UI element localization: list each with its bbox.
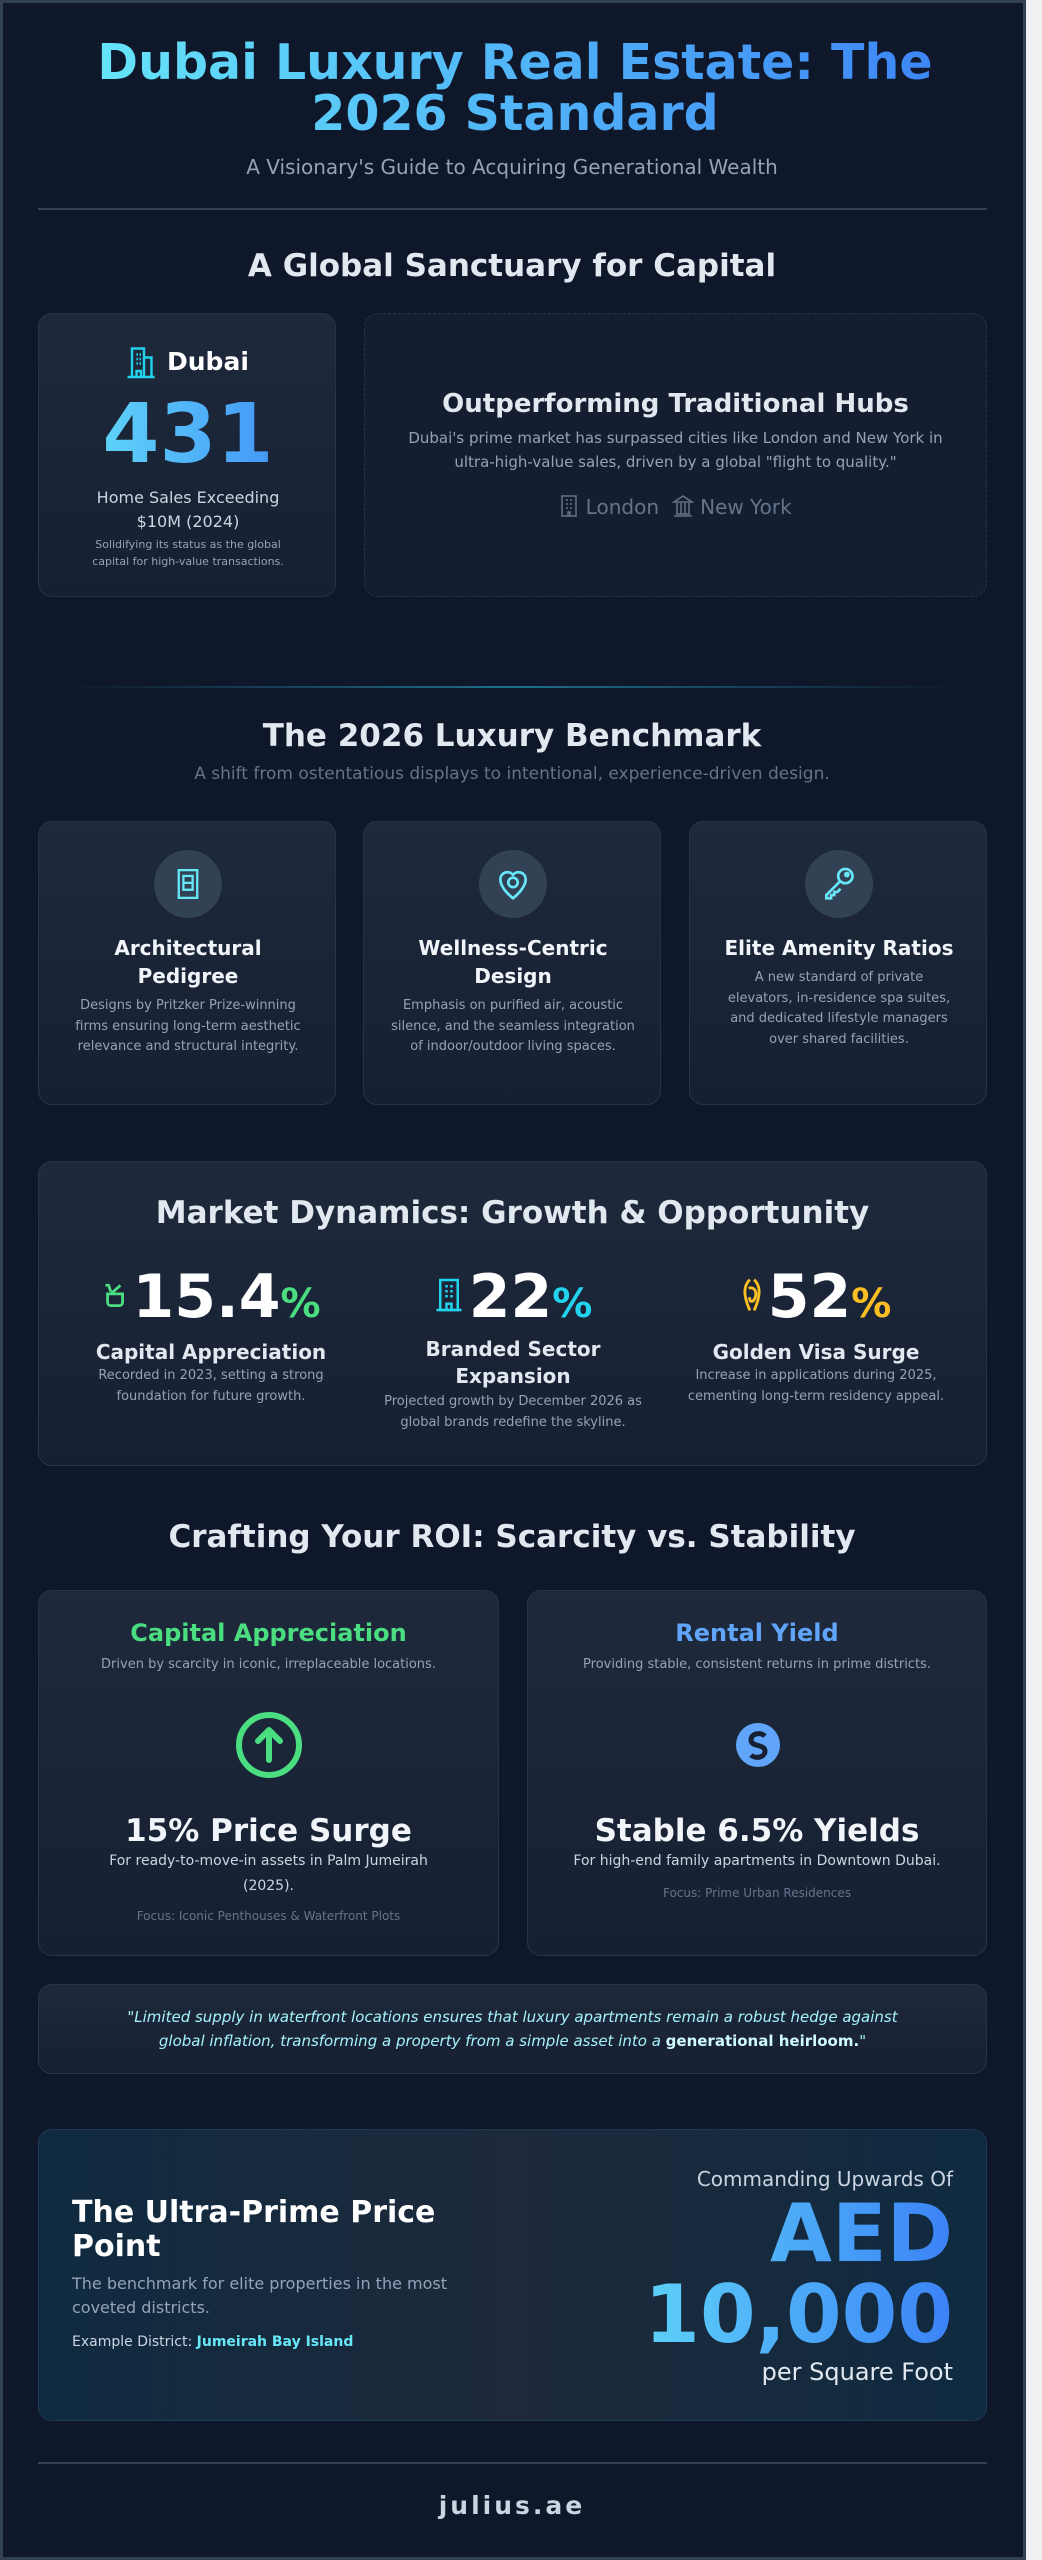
title <box>418 936 608 988</box>
focus: Focus: Iconic Penthouses & Waterfront Plots <box>137 1909 400 1923</box>
panel: Dubai stat <box>38 313 336 597</box>
title: Pedigree <box>138 964 238 988</box>
stat: 22% <box>384 1262 642 1430</box>
panel: ultra-prime price <box>38 2129 987 2421</box>
subtitle: benchmark: A shift from ostentatious displays to intentional, experience-driven design. <box>194 764 830 784</box>
price figure: per Square Foot <box>762 2358 953 2386</box>
desc: For ready-to-move-in assets in Palm Jumeirah (2025). <box>109 1853 428 1894</box>
title: Capital Appreciation <box>130 1619 407 1647</box>
stat: 52%: Golden Visa Surge <box>713 1340 919 1364</box>
subtitle: Providing stable, consistent returns in prime districts. <box>583 1657 931 1672</box>
panel: market dynamics <box>38 1161 987 1466</box>
number 431: 431 <box>102 387 274 482</box>
desc: A new standard of private elevators, in-residence spa suites, and dedicated lifestyle managers over shared facilities. <box>728 970 950 1046</box>
title: Design <box>474 964 552 988</box>
label: Dubai: Dubai <box>167 347 249 376</box>
price figure: 10,000 <box>644 2268 953 2361</box>
heading: The Ultra-Prime Price Point <box>72 2195 435 2264</box>
icon: key <box>805 850 873 918</box>
price figure: AED <box>770 2187 953 2280</box>
quote <box>38 1984 987 2074</box>
icon: building <box>128 347 154 378</box>
title: Elite Amenity Ratios <box>725 936 953 960</box>
stat: 15% Price Surge <box>125 1813 412 1849</box>
small text: Solidifying its status as the global capital for high-value transactions. <box>92 538 284 568</box>
stat: 22%: 22% <box>469 1262 592 1332</box>
stat: 22%: Projected growth by December 2026 as global brands redefine the skyline. <box>384 1394 642 1430</box>
desc: Emphasis on purified air, acoustic silence, and the seamless integration of indoor/outdoor living spaces. <box>391 998 635 1054</box>
description: Dubai's prime market has surpassed cities like London and New York in ultra-high-value sales, driven by a global "flight to quality." <box>408 429 943 471</box>
number 431 <box>39 388 337 482</box>
stat: 15.4%: 15.4% <box>132 1262 321 1332</box>
icon: heart <box>479 850 547 918</box>
heading: Market Dynamics: Growth & Opportunity <box>156 1195 869 1231</box>
stat: 52%: Increase in applications during 2025, cementing long-term residency appeal. <box>688 1368 944 1404</box>
subtitle: Driven by scarcity in iconic, irreplaceable locations. <box>101 1657 436 1672</box>
card: capital appreciation <box>38 1590 499 1956</box>
stat: 22%: Expansion <box>455 1364 571 1388</box>
card: rental yield <box>527 1590 987 1956</box>
card: elite amenity <box>689 821 987 1105</box>
panel: outperforming hubs <box>364 313 987 597</box>
quote: "Limited supply in waterfront locations ensures that luxury apartments remain a robust hedge against <box>127 2008 898 2026</box>
heading: benchmark: The 2026 Luxury Benchmark <box>263 718 761 754</box>
focus: Focus: Prime Urban Residences <box>663 1886 851 1900</box>
price figure <box>644 2167 954 2386</box>
stat: 52% <box>688 1262 944 1404</box>
stat: Stable 6.5% Yields <box>595 1813 919 1849</box>
stat: 15.4%: Recorded in 2023, setting a strong foundation for future growth. <box>98 1368 324 1404</box>
stat: 22%: Branded Sector <box>426 1337 600 1361</box>
quote: global inflation, transforming a property from a simple asset into a generational heirloom." <box>159 2032 866 2050</box>
subtitle: A Visionary's Guide to Acquiring Generational Wealth <box>246 155 778 179</box>
icon: arrow up circle <box>236 1712 302 1778</box>
title: Architectural <box>114 936 262 960</box>
desc: The benchmark for elite properties in the most coveted districts. <box>72 2274 447 2317</box>
text: Home Sales Exceeding $10M (2024) <box>97 488 279 531</box>
heading: ROI: Crafting Your ROI: Scarcity vs. Stability <box>168 1519 856 1555</box>
icon: door <box>154 850 222 918</box>
desc: Designs by Pritzker Prize-winning firms ensuring long-term aesthetic relevance and structural integrity. <box>75 998 301 1054</box>
title: Dubai Luxury Real Estate: The 2026 Standard <box>97 34 933 142</box>
card: wellness <box>363 821 661 1105</box>
title: Wellness-Centric <box>418 936 608 960</box>
stat: 15.4%: Capital Appreciation <box>96 1340 326 1364</box>
stat: 15.4% <box>96 1262 326 1404</box>
title: Rental Yield <box>675 1619 839 1647</box>
footer: julius.ae <box>439 2491 585 2520</box>
card: architectural pedigree <box>38 821 336 1105</box>
heading: global sanctuary: A Global Sanctuary for Capital <box>248 248 776 284</box>
icon: currency <box>736 1723 780 1767</box>
heading: Outperforming Traditional Hubs <box>442 389 909 419</box>
desc: For high-end family apartments in Downtown Dubai. <box>573 1853 941 1869</box>
price figure: Commanding Upwards Of <box>697 2167 953 2191</box>
cities: London New York <box>586 495 792 519</box>
stat: 52%: 52% <box>768 1262 891 1332</box>
title <box>114 936 262 988</box>
example district: Example District: Jumeirah Bay Island <box>72 2334 353 2350</box>
